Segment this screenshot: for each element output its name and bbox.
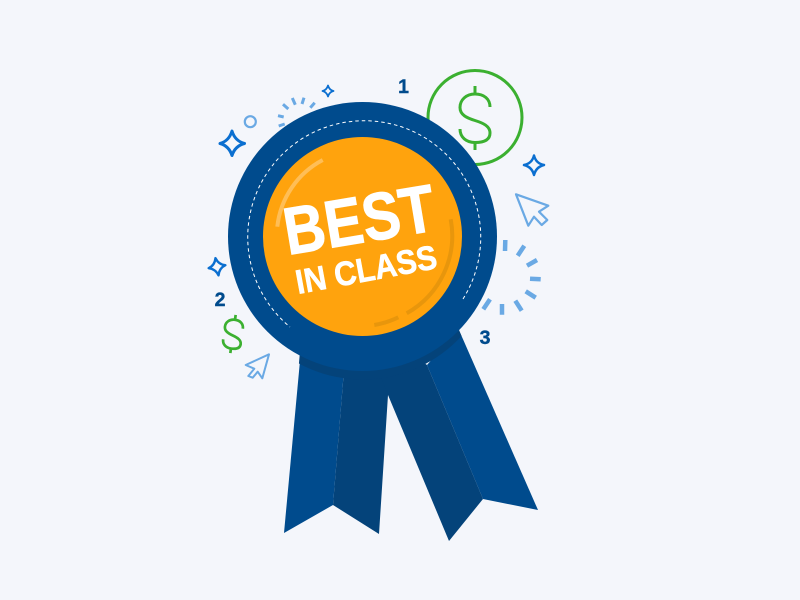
infographic: best in class ribbon [208, 69, 550, 541]
icon: small green dollar [221, 314, 245, 354]
icon: cursor left [246, 354, 269, 378]
medal [228, 102, 497, 371]
ribbon tails [284, 330, 538, 541]
icon: sparkle left [207, 257, 227, 277]
icon: large green dollar coin [428, 70, 522, 164]
heading: best: BEST [278, 171, 440, 270]
icon: cursor right [516, 194, 548, 226]
ticks: top burst [278, 98, 315, 126]
label: number 2: 2 [215, 289, 226, 311]
icon: sparkle upper left [220, 131, 244, 156]
icon: sparkle right [524, 156, 544, 175]
ticks: right burst [483, 240, 541, 315]
icon: small ring [245, 116, 256, 127]
heading: in class: IN CLASS [293, 238, 440, 302]
label: number 1: 1 [398, 76, 409, 98]
icon: sparkle top [322, 86, 334, 96]
label: number 3: 3 [480, 327, 491, 349]
